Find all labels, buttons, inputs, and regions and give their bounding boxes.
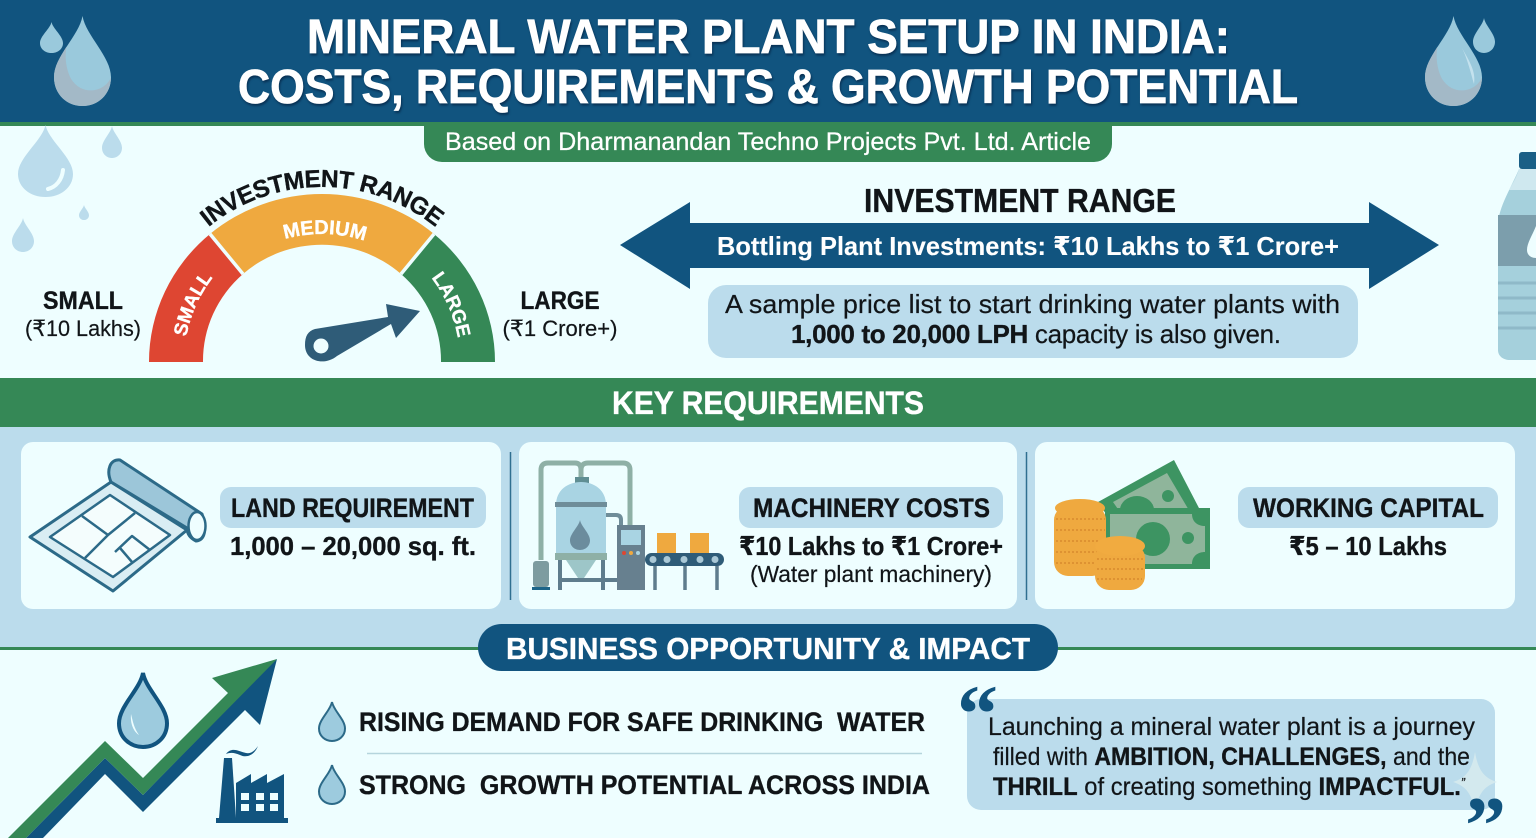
quote text: Launching a mineral water plant is a journey (988, 713, 1475, 741)
callout: sample price list: A sample price list to start drinking water plants with (725, 289, 1340, 319)
source pill (424, 124, 1112, 162)
callout: sample price list: 1,000 to 20,000 LPH capacity is also given. (791, 319, 1281, 349)
label pill: land requirement (220, 487, 486, 528)
bullet: rising demand (319, 702, 925, 741)
section heading: key requirements: KEY REQUIREMENTS (612, 385, 924, 421)
section heading: business opportunity and impact: BUSINESS OPPORTUNITY & IMPACT (506, 631, 1030, 666)
panel: working capital (1035, 442, 1515, 609)
label: small range: SMALL (43, 287, 123, 315)
label pill: working capital (1238, 487, 1498, 528)
panel: machinery costs (519, 442, 1017, 609)
label: small range (25, 287, 141, 341)
chart: rising growth arrow (8, 659, 277, 838)
label: small range: (₹10 Lakhs) (25, 316, 141, 341)
bullet: strong growth: STRONG GROWTH POTENTIAL ACROSS INDIA (359, 770, 930, 800)
double-headed arrow: bottling plant investments (620, 202, 1439, 289)
icon: header water drops left (40, 16, 111, 106)
icon: water plant machinery (532, 463, 724, 590)
heading: investment range: INVESTMENT RANGE (864, 182, 1176, 219)
label pill: land requirement: LAND REQUIREMENT (231, 493, 474, 523)
gauge needle (305, 304, 420, 361)
gauge segment: small (149, 234, 243, 362)
double-headed arrow: bottling plant investments: Bottling Plant Investments: ₹10 Lakhs to ₹1 Crore+ (717, 231, 1339, 261)
note: water plant machinery: (Water plant machinery) (750, 561, 992, 587)
header banner (0, 0, 1536, 126)
bullet: strong growth (319, 765, 930, 804)
decorative water drops top left (12, 125, 122, 252)
label: large range: LARGE (520, 287, 600, 315)
icon: water bottle (1498, 152, 1536, 360)
label pill: working capital: WORKING CAPITAL (1253, 493, 1484, 523)
quote text (988, 713, 1475, 801)
label: large range: (₹1 Crore+) (502, 316, 618, 341)
quote panel (957, 668, 1506, 838)
label pill: machinery costs (739, 487, 1003, 528)
quote text: ” (1461, 775, 1466, 790)
icon: water drop above arrow (119, 673, 167, 747)
gauge label: medium: MEDIUM (282, 220, 368, 240)
gauge side labels: SMALL LARGE (174, 270, 471, 338)
opening quote mark: “ (957, 668, 998, 759)
title (238, 11, 1298, 114)
source pill: Based on Dharmanandan Techno Projects Pvt. Ltd. Article (445, 128, 1091, 156)
quote text: THRILL of creating something IMPACTFUL. (993, 773, 1468, 801)
bullet: rising demand: RISING DEMAND FOR SAFE DRINKING WATER (359, 707, 925, 737)
icon: header water drops right (1425, 16, 1495, 106)
title: MINERAL WATER PLANT SETUP IN INDIA: (307, 11, 1230, 64)
section heading: key requirements (0, 378, 1536, 427)
label pill: machinery costs: MACHINERY COSTS (753, 493, 990, 523)
gauge segment: medium (210, 194, 434, 274)
value: land requirement: 1,000 – 20,000 sq. ft. (230, 531, 476, 561)
sparkle decoration (1453, 752, 1497, 812)
icon: banknotes and coins (1054, 460, 1210, 590)
value: machinery costs: ₹10 Lakhs to ₹1 Crore+ (739, 531, 1003, 561)
title: COSTS, REQUIREMENTS & GROWTH POTENTIAL (238, 61, 1298, 114)
gauge arc title: INVESTMENT RANGE (199, 170, 445, 227)
quote text: filled with AMBITION, CHALLENGES, and the (993, 743, 1470, 771)
label: large range (502, 287, 618, 341)
value: working capital: ₹5 – 10 Lakhs (1289, 531, 1447, 561)
gauge segment: large (401, 234, 495, 362)
callout: sample price list (708, 285, 1358, 358)
icon: blueprint (30, 460, 206, 591)
icon: factory (216, 746, 288, 823)
panel: land requirement (21, 442, 501, 609)
gauge: investment range (149, 170, 495, 362)
